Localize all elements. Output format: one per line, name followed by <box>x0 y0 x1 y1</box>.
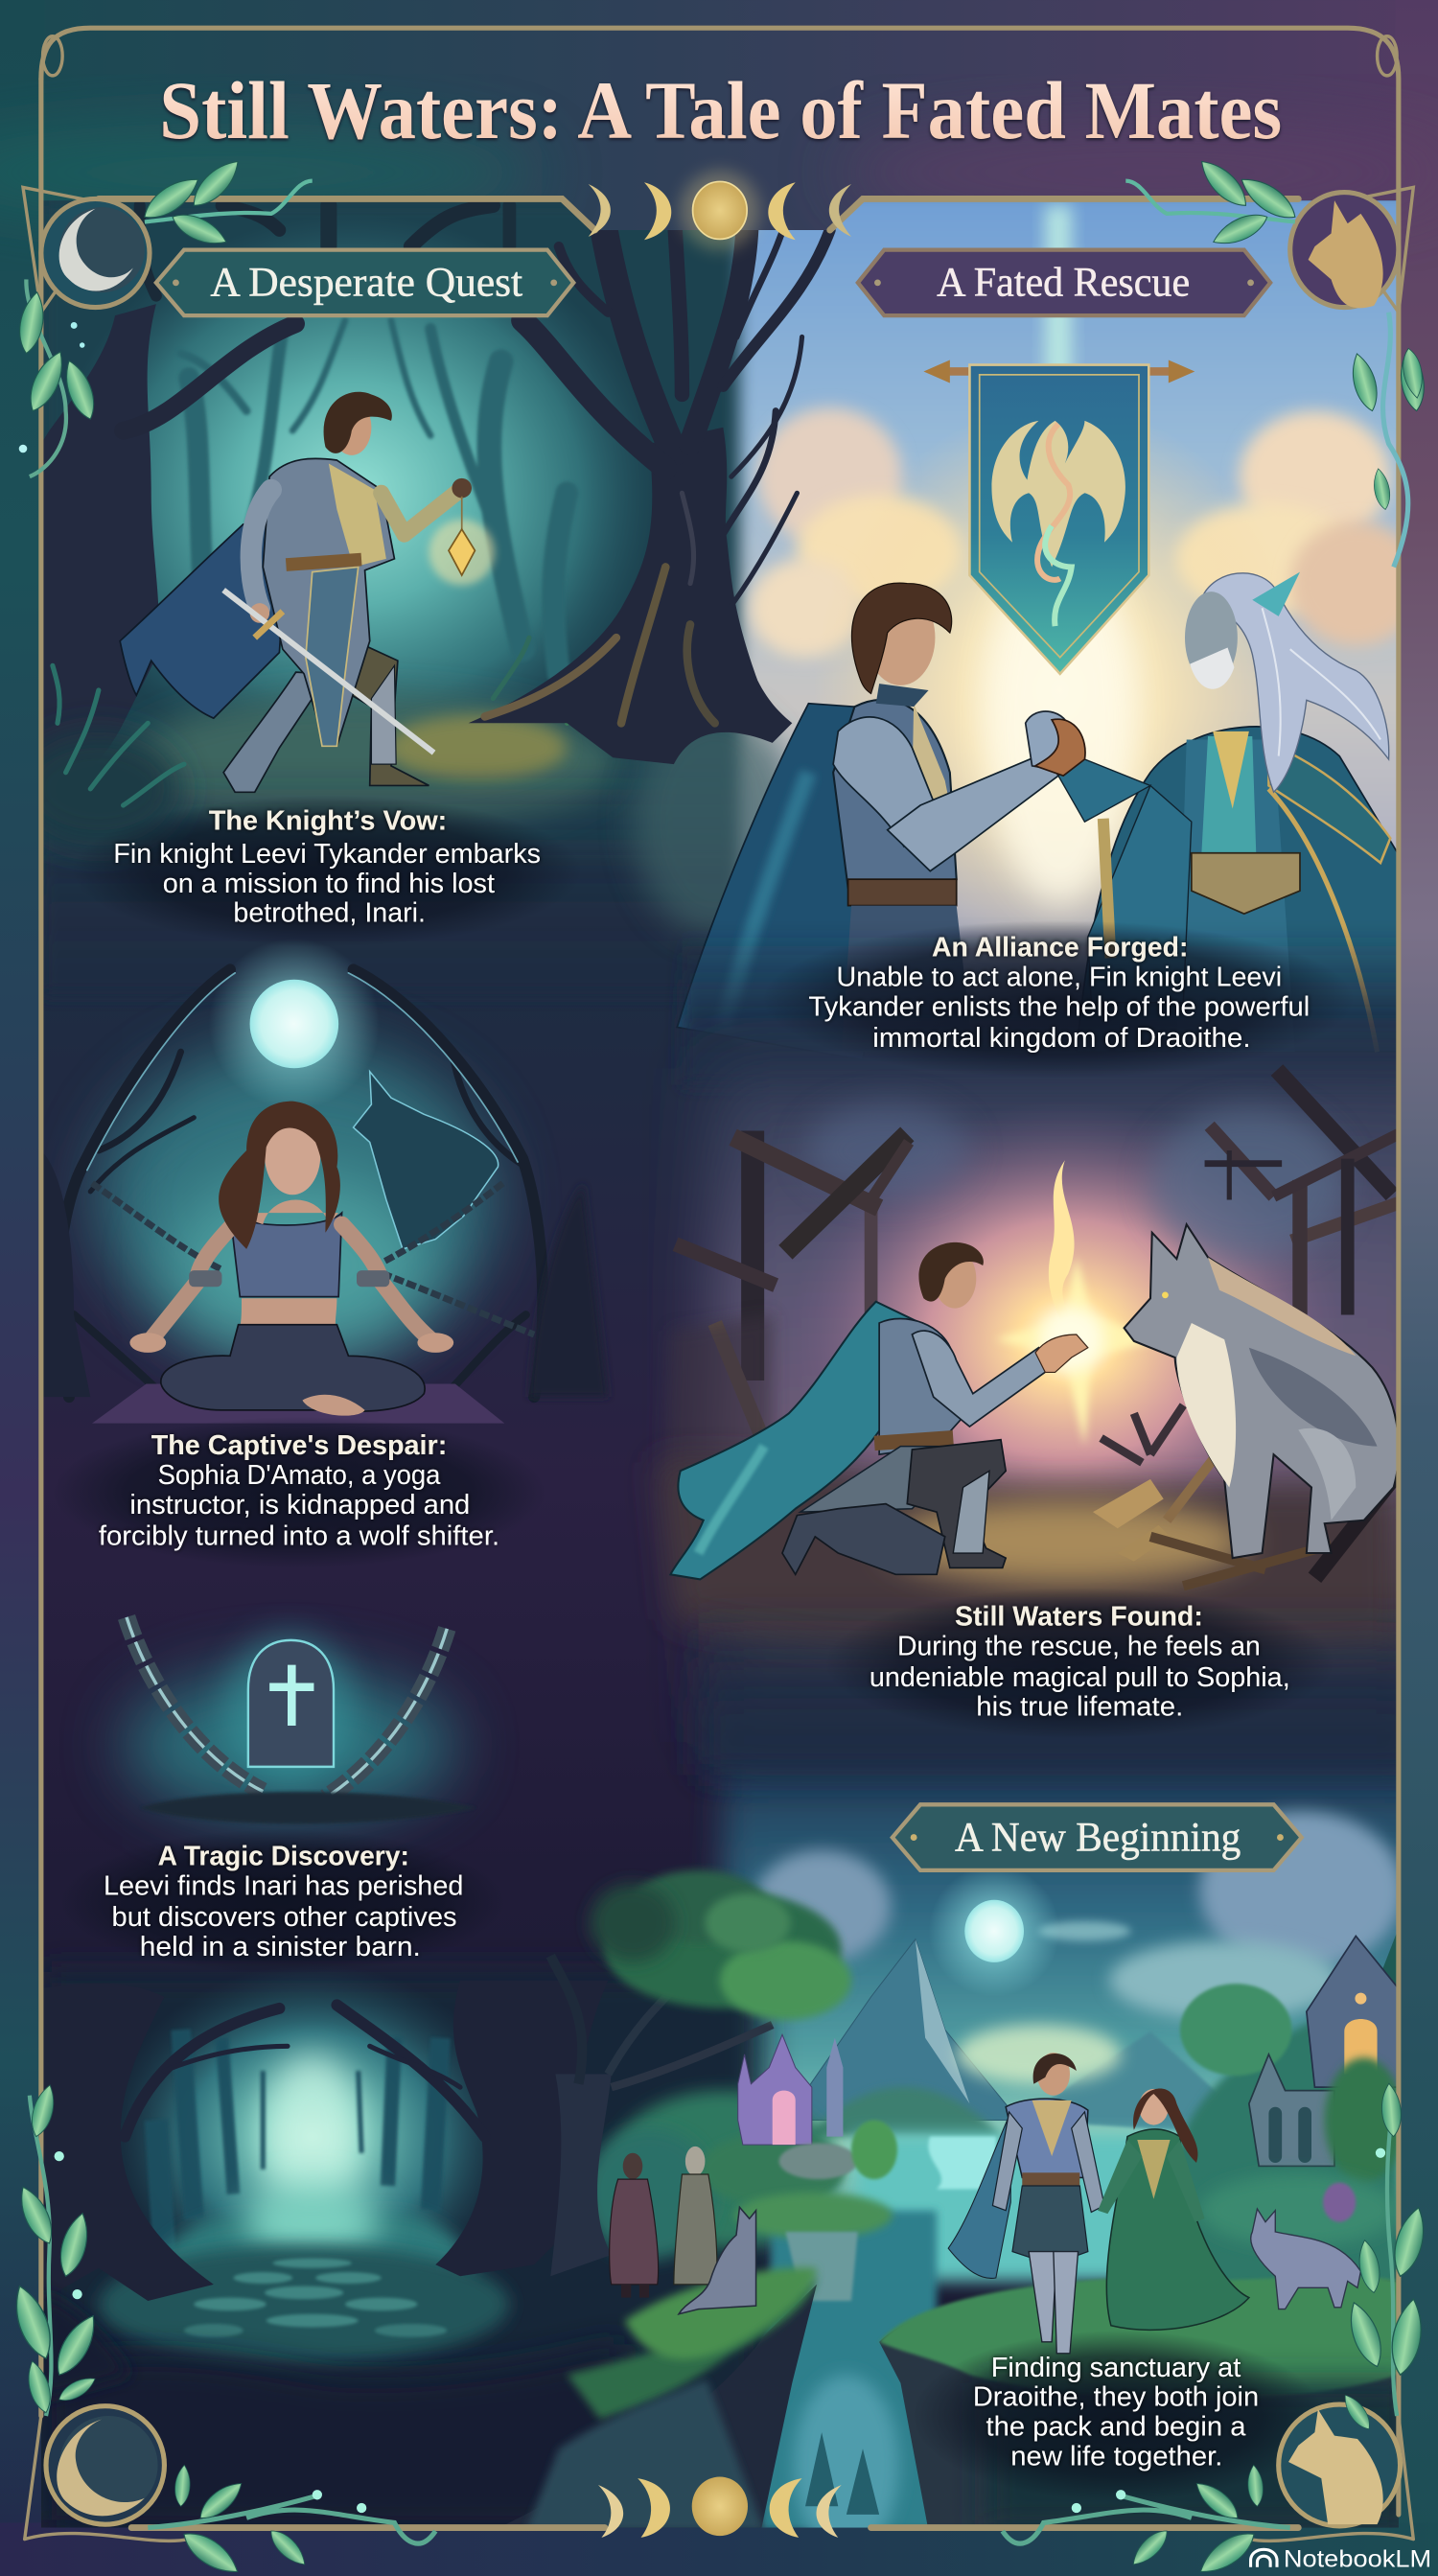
text block: a tragic discovery <box>104 1842 463 1962</box>
figure: woman in green gown <box>1098 2089 1249 2330</box>
figure: kneeling knight <box>670 1242 1088 1579</box>
background trees <box>181 320 567 674</box>
sword <box>223 590 434 753</box>
figure: robed companion <box>610 2153 659 2298</box>
panel: couple walking <box>948 2053 1360 2354</box>
cape <box>120 524 288 718</box>
tree: great oak <box>41 205 830 805</box>
figure: meditating woman <box>129 1102 453 1416</box>
oak canopy <box>590 1870 851 2020</box>
heading: a fated rescue: A Fated Rescue <box>937 261 1190 306</box>
legs <box>907 1440 1006 1567</box>
chains <box>92 1183 534 1334</box>
torso <box>263 458 394 746</box>
head <box>934 1249 976 1309</box>
icon: dragon emblem <box>991 421 1125 626</box>
icon: wolf medallion top right <box>1290 193 1399 308</box>
text block: a tragic discovery: Leevi finds Inari has perished <box>104 1871 463 1902</box>
text block: an alliance forged: immortal kingdom of Draoithe. <box>872 1023 1251 1054</box>
moon <box>209 939 380 1109</box>
oak trunk <box>550 2074 612 2276</box>
text block: still waters found <box>870 1601 1290 1723</box>
text block: an alliance forged: An Alliance Forged: <box>932 933 1188 963</box>
vines: bottom right <box>1003 2082 1430 2576</box>
text block: the knight's vow: on a mission to find his lost <box>163 869 495 899</box>
cottage with lit door <box>1307 1936 1399 2087</box>
panel: left cliff <box>493 2267 817 2531</box>
heading: a desperate quest <box>156 250 573 315</box>
vines: top right <box>1125 153 1427 567</box>
text block: finding sanctuary: the pack and begin a <box>986 2412 1246 2443</box>
heading: a fated rescue <box>858 250 1270 315</box>
vines: top left <box>15 153 313 476</box>
text block: the knight's vow: The Knight’s Vow: <box>209 806 447 837</box>
figure: grey wolf <box>1251 2209 1360 2309</box>
figure: grey-robed elder <box>674 2147 717 2285</box>
arm with chain <box>382 490 460 534</box>
figure: knight <box>948 2053 1104 2354</box>
panel: a fated rescue sky <box>633 189 1429 1044</box>
head <box>332 400 371 455</box>
text block: still waters found: his true lifemate. <box>976 1692 1183 1723</box>
panel: right cliff <box>879 2277 1413 2531</box>
ferns at forest edge <box>16 665 184 847</box>
text block: an alliance forged: Unable to act alone, Fin knight Leevi <box>837 963 1282 993</box>
rubble <box>1093 1405 1399 1586</box>
icon: top moon phases <box>589 171 851 250</box>
spirit wolf <box>354 1072 499 1249</box>
text darkening halos <box>53 796 1355 1974</box>
heading: a desperate quest: A Desperate Quest <box>210 261 522 306</box>
text block: the knight's vow <box>113 806 541 929</box>
left tree <box>41 304 159 805</box>
panel: a desperate quest forest <box>41 200 764 994</box>
text block: finding sanctuary: Finding sanctuary at <box>991 2353 1241 2383</box>
panel: castle <box>700 2034 897 2206</box>
flowing hair <box>1199 573 1389 792</box>
brand mark: NotebookLM: NotebookLM <box>1284 2547 1431 2573</box>
undergrowth behind companions <box>608 2091 838 2248</box>
text block: finding sanctuary: new life together. <box>1010 2441 1222 2472</box>
text block: finding sanctuary <box>973 2353 1259 2472</box>
panel: bottom forest tunnel <box>41 1870 851 2531</box>
text block: a tragic discovery: A Tragic Discovery: <box>158 1842 409 1872</box>
figure: sitting wolf <box>679 2207 756 2314</box>
icon: dragon banner <box>923 360 1194 674</box>
magical glow burst <box>996 1160 1160 1447</box>
text block: the captive's despair: forcibly turned into a wolf shifter. <box>99 1520 499 1551</box>
shoulder and upper arm <box>833 717 941 847</box>
arm <box>912 1331 1052 1427</box>
text block: the knight's vow: betrothed, Inari. <box>233 898 426 929</box>
legs <box>223 672 329 792</box>
chains <box>127 1617 447 1798</box>
text block: an alliance forged: Tykander enlists the help of the powerful <box>808 991 1310 1022</box>
vines: bottom left <box>7 2082 435 2576</box>
glow behind captive <box>99 1044 493 1356</box>
icon: glowing cross <box>269 1665 313 1726</box>
text block: a tragic discovery: but discovers other captives <box>112 1902 457 1933</box>
mossy ground <box>124 695 616 833</box>
text block: the captive's despair: instructor, is kidnapped and <box>129 1490 470 1520</box>
panel: waterfall and chasm <box>734 2193 937 2556</box>
icon: crescent moon medallion top left <box>41 198 150 308</box>
icon: wolf medallion bottom right <box>1279 2404 1401 2526</box>
sleeve <box>1058 756 1192 1003</box>
panel: a new beginning landscape backdrop <box>723 1742 1429 2301</box>
text block: still waters found: During the rescue, he feels an <box>897 1631 1261 1661</box>
text block: the captive's despair <box>99 1430 499 1551</box>
tunnel trees <box>41 1981 608 2301</box>
figure: knight clasping hands <box>677 583 1058 1060</box>
text block: still waters found: undeniable magical pull to Sophia, <box>870 1662 1290 1693</box>
amulet <box>429 520 495 585</box>
text block: a tragic discovery: held in a sinister barn. <box>140 1932 421 1962</box>
figure: elf lord <box>1026 572 1399 1052</box>
icon: crescent medallion bottom left <box>46 2406 164 2524</box>
text block: the captive's despair: Sophia D'Amato, a yoga <box>158 1460 441 1491</box>
title: Still Waters: A Tale of Fated Mates <box>159 65 1282 156</box>
text block: finding sanctuary: Draoithe, they both join <box>973 2382 1259 2413</box>
stone shrine <box>1249 2054 1334 2166</box>
panel: the captive's despair <box>41 939 608 1424</box>
icon: bottom moon phases <box>598 2476 842 2538</box>
clouds <box>750 407 1422 658</box>
panel: still waters found ruins <box>658 1068 1438 1775</box>
yoga mat <box>92 1383 504 1424</box>
panel: a tragic discovery <box>125 1617 476 1823</box>
clasped hands <box>1026 711 1085 776</box>
panel: companions on the cliff <box>610 2147 756 2314</box>
figure: wolf <box>1125 1224 1399 1558</box>
heading: a new beginning <box>893 1804 1302 1870</box>
text block: an alliance forged <box>808 933 1310 1054</box>
ferns <box>493 638 595 723</box>
ruined beams <box>665 1070 1399 1479</box>
tombstone <box>248 1640 334 1767</box>
figure: knight with lantern <box>120 392 495 792</box>
branches <box>58 969 543 1397</box>
text block: the captive's despair: The Captive's Despair: <box>151 1430 447 1461</box>
text block: the knight's vow: Fin knight Leevi Tykander embarks <box>113 839 541 870</box>
text block: still waters found: Still Waters Found: <box>955 1601 1203 1632</box>
heading: a new beginning: A New Beginning <box>955 1815 1241 1860</box>
